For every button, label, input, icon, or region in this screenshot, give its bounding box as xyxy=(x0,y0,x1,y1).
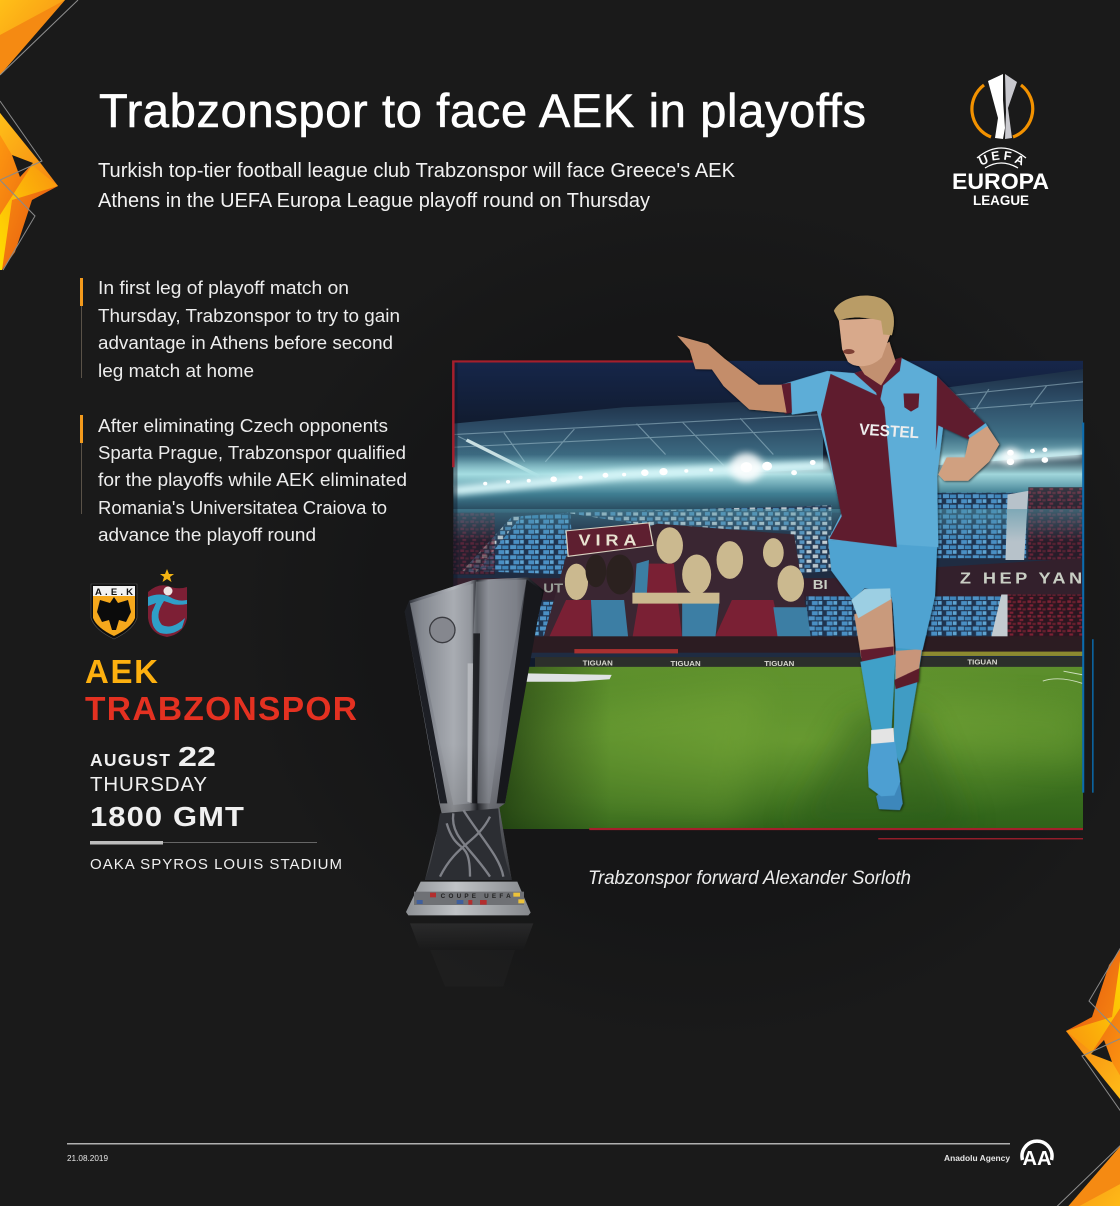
crowd mosaics xyxy=(462,513,574,575)
stadium lights xyxy=(453,448,1083,491)
text block: key points: leg match at home xyxy=(98,360,254,381)
icon: Trabzonspor crest xyxy=(148,569,187,637)
shorts xyxy=(828,540,937,650)
match date and time: THURSDAY xyxy=(90,773,207,796)
match date and time: OAKA SPYROS LOUIS STADIUM xyxy=(90,856,342,873)
match date and time: 22 xyxy=(178,741,216,772)
trophy base xyxy=(406,882,531,915)
match date and time xyxy=(90,741,342,873)
trophy: Europa League cup xyxy=(405,577,544,915)
tifo banner xyxy=(543,523,811,638)
logo: UEFA Europa League: LEAGUE xyxy=(973,192,1029,208)
trophy reflection xyxy=(410,923,533,987)
front leg xyxy=(854,598,894,658)
subtitle: Turkish top-tier football league club Trabzonspor will face Greece's AEK xyxy=(98,160,736,182)
text block: key points: advance the playoff round xyxy=(98,524,316,545)
advertising boards xyxy=(535,657,1083,668)
caption: Trabzonspor forward Alexander Sorloth xyxy=(588,868,911,889)
neck and head xyxy=(856,342,896,385)
stadium background: TIGUAN xyxy=(764,660,794,668)
logo: Anadolu Agency: AA xyxy=(1022,1148,1052,1170)
stadium background: TIGUAN xyxy=(583,659,613,667)
logo: UEFA Europa League: EUROPA xyxy=(952,169,1049,194)
pitch xyxy=(453,667,1083,829)
logo: UEFA Europa League: E xyxy=(990,149,1001,164)
icon: AEK crest xyxy=(91,584,137,639)
text block: key points: Thursday, Trabzonspor to try to gain xyxy=(98,305,400,326)
icon: AEK crest: A.E.K xyxy=(95,587,133,598)
match date and time: AUGUST xyxy=(90,750,170,770)
accent bar 1 xyxy=(80,278,83,306)
stands row xyxy=(531,636,1083,653)
title: Trabzonspor to face AEK in playoffs xyxy=(99,84,866,137)
logo: UEFA Europa League: F xyxy=(1003,149,1013,164)
text block: key points: advantage in Athens before second xyxy=(98,332,393,353)
logo: UEFA Europa League: A xyxy=(1013,152,1026,168)
player: Alexander Sorloth xyxy=(677,296,999,810)
footer line xyxy=(67,1143,1010,1144)
stadium background: TIGUAN xyxy=(671,660,701,668)
frame lines xyxy=(453,361,1094,839)
stadium background: TIGUAN xyxy=(967,658,997,667)
teams: Trabzonspor: TRABZONSPOR xyxy=(85,691,357,728)
footer date: 21.08.2019 xyxy=(67,1153,108,1163)
photo left fade xyxy=(454,362,458,586)
logo: UEFA Europa League: U xyxy=(977,152,990,168)
footer source: Anadolu Agency xyxy=(944,1153,1010,1163)
banner text: Z HEP YAN xyxy=(960,569,1082,587)
text block: key points: for the playoffs while AEK eliminated xyxy=(98,469,407,490)
torso xyxy=(781,358,986,547)
teams: AEK: AEK xyxy=(85,653,158,690)
back leg xyxy=(894,647,923,764)
stadium background xyxy=(453,361,1083,829)
stadium background: UT xyxy=(543,581,564,595)
pointing arm xyxy=(677,336,787,413)
match date and time: 1800 GMT xyxy=(90,801,245,832)
crowd and haze xyxy=(453,456,1082,513)
text block: key points: Sparta Prague, Trabzonspor qualified xyxy=(98,442,406,463)
subtitle: Athens in the UEFA Europa League playoff round on Thursday xyxy=(98,190,650,212)
player: Alexander Sorloth: VESTEL xyxy=(858,420,920,442)
text block: key points: Romania's Universitatea Craiova to xyxy=(98,497,387,518)
trophy base: COUPE UEFA xyxy=(441,893,511,900)
text block: key points: After eliminating Czech opponents xyxy=(98,415,388,436)
tifo banner: VIRA xyxy=(579,531,637,549)
text block: key points: In first leg of playoff match on xyxy=(98,277,349,298)
text block: key points xyxy=(80,277,407,545)
stadium roof xyxy=(453,398,823,487)
subtitle xyxy=(98,160,736,212)
stadium background: BI xyxy=(813,577,828,592)
logo: UEFA Europa League xyxy=(952,74,1049,208)
decoration: orange burst top left xyxy=(0,0,78,270)
decoration: orange burst bottom right xyxy=(1046,947,1120,1206)
left arm xyxy=(938,426,999,481)
photo: stadium and player xyxy=(453,296,1094,839)
accent bar 2 xyxy=(80,415,83,443)
